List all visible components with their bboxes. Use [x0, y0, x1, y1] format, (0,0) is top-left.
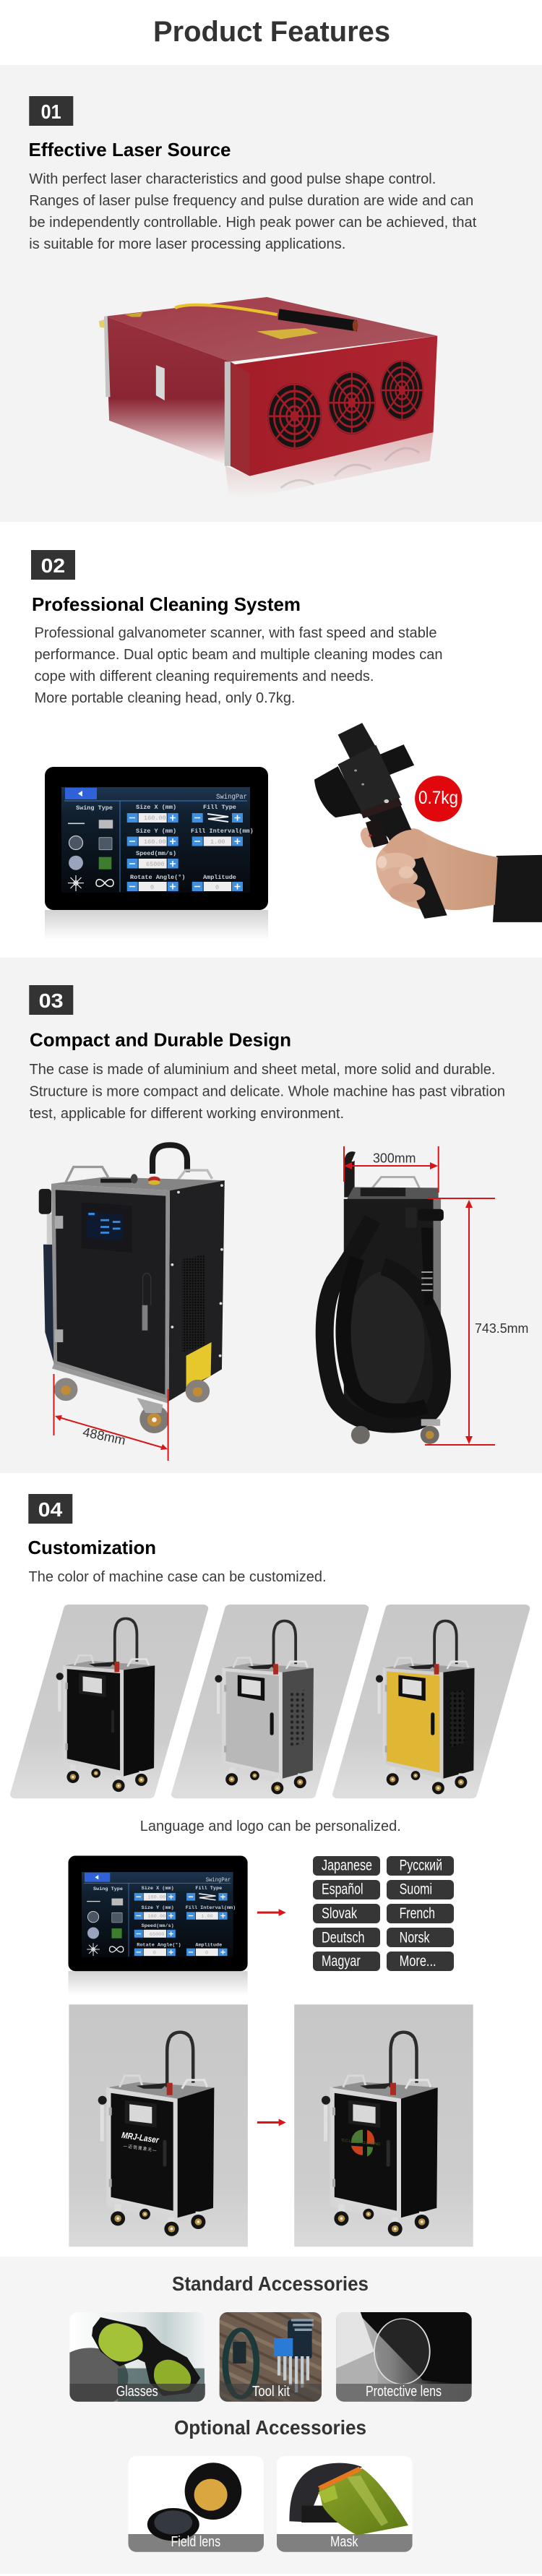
card: tool kit	[220, 2312, 322, 2402]
image: touch panel small: Size Y (mm)	[142, 1905, 174, 1911]
panel: accessories	[0, 2257, 542, 2574]
caption: glasses: Glasses	[116, 2384, 158, 2400]
badge 02: 02	[41, 554, 65, 577]
badge 03	[29, 985, 73, 1015]
image: touch panel small: 160.00	[148, 1894, 165, 1900]
heading: customization: Customization	[27, 1537, 156, 1558]
text block: laser source description	[29, 171, 477, 252]
heading: standard accessories: Standard Accessories	[172, 2272, 369, 2295]
image: red laser source box	[99, 297, 437, 498]
card: glasses	[69, 2312, 205, 2402]
text block: laser source description: Ranges of laser pulse frequency and pulse duration are wide and can	[29, 193, 473, 209]
dimension: 743.5mm	[425, 1198, 528, 1445]
heading: optional accessories: Optional Accessories	[174, 2416, 366, 2439]
language button grid: Español	[322, 1881, 363, 1898]
image: touch panel small: Speed(mm/s)	[142, 1923, 174, 1929]
image: machine with custom logo	[294, 2004, 473, 2246]
card: mask	[277, 2456, 413, 2552]
badge: 0.7kg	[415, 776, 462, 822]
badge 01: 01	[41, 100, 61, 123]
dimension: 488mm: 488mm	[82, 1425, 127, 1448]
heading: effective laser source: Effective Laser Source	[29, 139, 231, 160]
card: field lens	[129, 2456, 264, 2552]
dimension: 488mm	[53, 1374, 168, 1461]
image: touch panel: Size Y (mm)	[136, 828, 176, 835]
image: colour cards backgrounds	[16, 1608, 525, 1795]
language button grid: More...	[400, 1953, 436, 1970]
image: touch panel: Speed(mm/s)	[136, 850, 176, 857]
image: machine with default logo: MRJ-Laser	[121, 2130, 160, 2145]
language button grid: Slovak	[322, 1905, 357, 1922]
image: machine with custom logo: TLC LASER CLEANING	[341, 2139, 380, 2147]
image: touch panel: Size X (mm)	[136, 804, 176, 811]
text block: laser source description: be independently controllable. High peak power can be achieved, that	[29, 215, 477, 231]
text block: design description: test, applicable for different working environment.	[29, 1106, 344, 1122]
image: touch panel small: Fill Interval(mm)	[186, 1905, 236, 1911]
language button grid: Magyar	[322, 1953, 361, 1970]
image: touch panel: 1.00	[210, 838, 225, 846]
image: touch panel: Fill Interval(mm)	[191, 828, 254, 835]
image: machine side view with hose	[324, 1156, 444, 1444]
image: touch panel small: 0	[153, 1951, 156, 1957]
badge 03: 03	[39, 989, 64, 1012]
language button grid: Norsk	[400, 1930, 430, 1946]
heading: compact and durable design: Compact and Durable Design	[30, 1029, 291, 1051]
card: protective lens	[336, 2312, 472, 2402]
image: yellow machine	[376, 1621, 475, 1794]
image: touch panel small: Rotate Angle(°)	[137, 1941, 181, 1948]
image: touch panel small: 0	[205, 1951, 208, 1957]
image: touch panel: SwingPar	[216, 793, 247, 802]
dimension: 743.5mm: 743.5mm	[475, 1321, 528, 1336]
badge 04	[28, 1494, 72, 1524]
panel: section 02 cleaning system	[31, 550, 542, 940]
text block: cleaning system description: More portable cleaning head, only 0.7kg.	[35, 690, 295, 706]
image: touch panel: Fill Type	[203, 804, 236, 811]
caption: mask: Mask	[330, 2534, 358, 2550]
image: touch panel small: 160.00	[148, 1914, 165, 1920]
image: touch panel small: Swing Type	[93, 1886, 123, 1892]
heading: professional cleaning system: Professional Cleaning System	[32, 593, 301, 615]
text: colour customization: The color of machine case can be customized.	[29, 1569, 327, 1585]
language button grid: Deutsch	[322, 1930, 364, 1946]
dimension: 300mm	[344, 1146, 439, 1193]
image: touch panel: Amplitude	[203, 874, 236, 881]
language button grid: Japanese	[322, 1858, 372, 1873]
text block: design description: Structure is more compact and delicate. Whole machine has past vibration	[29, 1084, 505, 1100]
image: touch panel: 0	[215, 884, 219, 891]
image: touch panel small: 1.00	[201, 1914, 213, 1920]
caption: tool kit: Tool kit	[252, 2384, 290, 2400]
image: machine with default logo: — 迈 锐 捷 激 光 —	[123, 2143, 157, 2153]
image: machine front view with width dimension	[39, 1145, 225, 1433]
image: touch panel small: SwingPar	[206, 1877, 231, 1884]
badge 04: 04	[38, 1498, 63, 1521]
panel: section 04 customization	[16, 1494, 525, 2246]
language button grid: Русский	[400, 1858, 442, 1873]
image: touch panel: 160.00	[144, 838, 166, 846]
image: touch panel: 0	[150, 884, 154, 891]
image: touch panel: Swing Type	[76, 804, 113, 812]
image: touch panel: 160.00	[144, 815, 166, 822]
caption: field lens: Field lens	[171, 2534, 220, 2550]
panel: section 03 compact design	[0, 958, 542, 1473]
image: black machine	[56, 1618, 155, 1792]
image: handheld cleaning head in hand	[314, 723, 542, 922]
text block: cleaning system description: Professional galvanometer scanner, with fast speed and stable	[35, 625, 436, 641]
text block: cleaning system description: cope with different cleaning requirements and needs.	[35, 669, 374, 684]
badge 02	[31, 550, 75, 580]
text block: laser source description: is suitable for more laser processing applications.	[29, 236, 345, 252]
text block: design description: The case is made of aluminium and sheet metal, more solid and durable.	[29, 1062, 496, 1078]
image: touch panel: Rotate Angle(°)	[130, 874, 186, 881]
text: language and logo: Language and logo can be personalized.	[140, 1819, 401, 1834]
text block: cleaning system description: performance. Dual optic beam and multiple cleaning modes can	[35, 647, 442, 663]
image: touch panel small: Fill Type	[195, 1886, 222, 1892]
image: silver machine	[215, 1621, 314, 1794]
text block: cleaning system description	[35, 625, 442, 706]
arrow: default logo to custom logo	[257, 2118, 286, 2126]
label: 0.7kg: 0.7kg	[418, 788, 458, 808]
language button grid: French	[400, 1905, 435, 1922]
caption: protective lens: Protective lens	[366, 2384, 442, 2400]
text block: laser source description: With perfect laser characteristics and good pulse shape control.	[29, 171, 436, 187]
arrow: panel to languages	[257, 1909, 286, 1916]
image: touch panel small: Size X (mm)	[142, 1886, 174, 1892]
page title: Product Features	[153, 16, 390, 48]
text block: design description	[29, 1062, 505, 1122]
language button grid: Suomi	[400, 1881, 432, 1898]
image: touch panel small: Amplitude	[195, 1942, 222, 1948]
panel: section 01 laser source	[0, 65, 542, 522]
image: touch panel	[45, 767, 268, 940]
badge 01	[29, 96, 73, 126]
image: touch panel small	[68, 1856, 248, 1996]
image: machine with default logo	[69, 2004, 248, 2246]
image: touch panel small: 65000	[150, 1932, 164, 1938]
image: touch panel: 65000	[146, 861, 165, 868]
language button grid	[313, 1856, 454, 1971]
dimension: 300mm: 300mm	[373, 1151, 416, 1165]
